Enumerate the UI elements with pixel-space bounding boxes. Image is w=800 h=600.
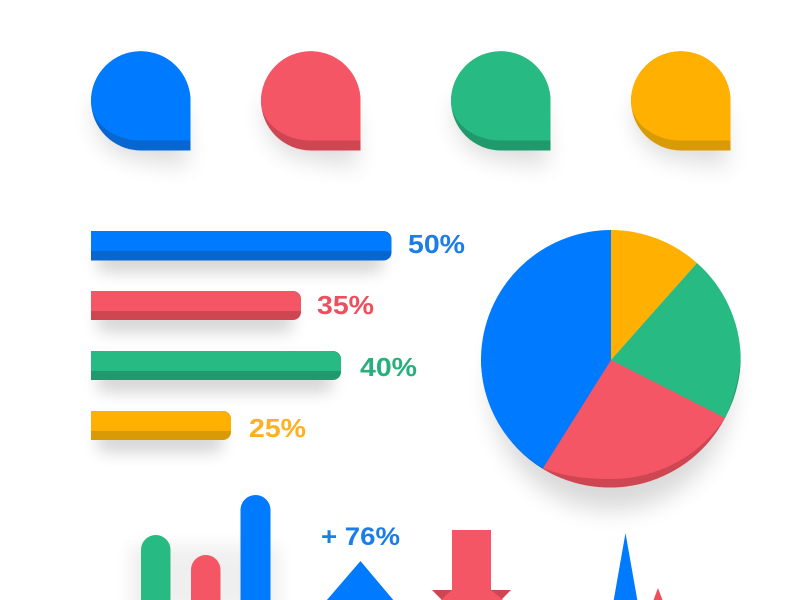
icon: red pin (261, 51, 360, 167)
column: green (141, 535, 170, 600)
bar: yellow 25%: 25% (249, 415, 306, 443)
icon: spike line chart (613, 533, 664, 600)
pie chart (481, 230, 741, 510)
column: blue (240, 495, 270, 600)
arrow: red down arrow (432, 530, 511, 600)
slice: yellow (611, 230, 697, 360)
panel: teardrop pins (91, 51, 730, 167)
panel: horizontal bar chart (91, 231, 465, 452)
icon: blue pin (91, 51, 190, 167)
column: red (191, 555, 220, 600)
bar: blue 50% (91, 231, 465, 272)
bar: yellow 25% (91, 411, 306, 452)
slice: blue (481, 230, 611, 468)
bar: red 35%: 35% (317, 292, 374, 320)
icon: green pin (451, 51, 550, 167)
callout: plus 76 percent with up arrow (320, 523, 400, 600)
icon: yellow pin (631, 51, 730, 167)
bar: green 40%: 40% (360, 354, 417, 382)
panel: vertical rounded columns (130, 495, 280, 600)
callout: plus 76 percent with up arrow: + 76% (321, 523, 400, 551)
slice: green (611, 263, 741, 418)
slice: red (543, 360, 725, 479)
bar: green 40% (91, 351, 417, 392)
bar: red 35% (91, 291, 374, 332)
bar: blue 50%: 50% (408, 231, 465, 259)
